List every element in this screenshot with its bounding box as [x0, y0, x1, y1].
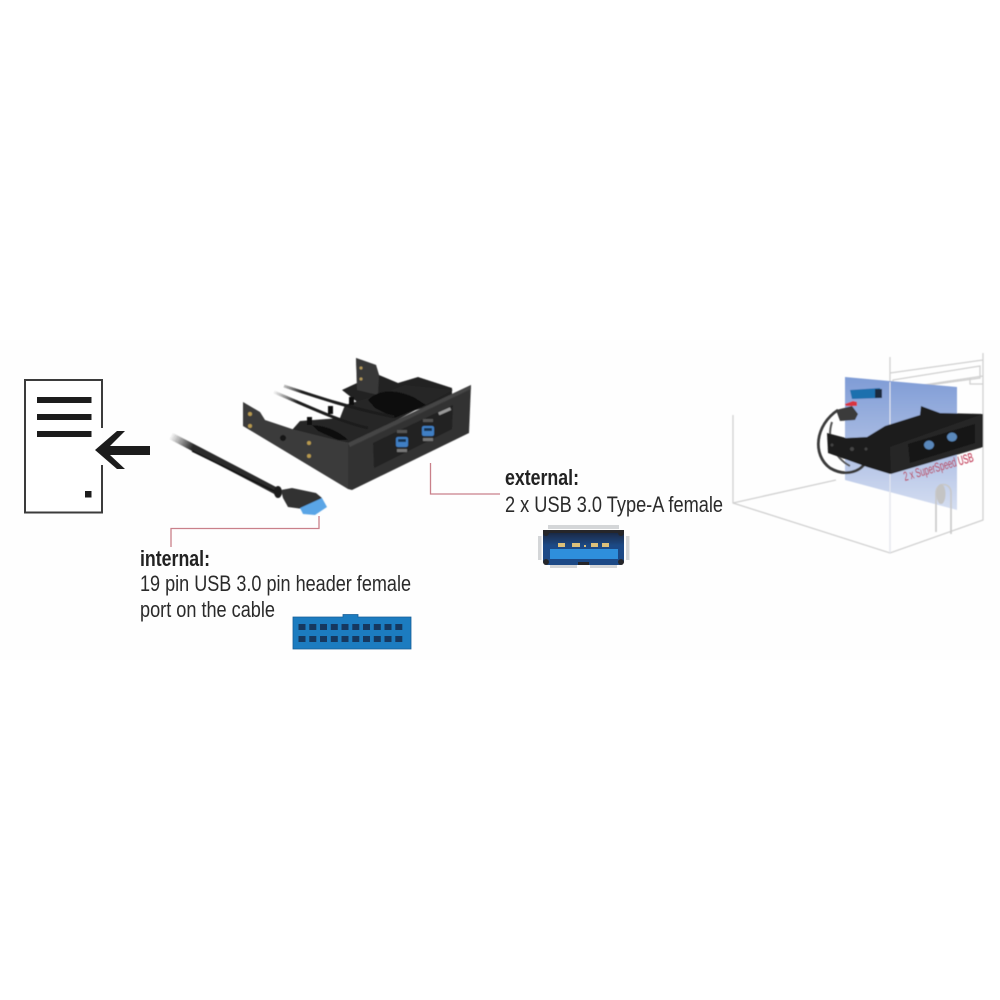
arrow: into the PC — [95, 431, 150, 469]
red insertion arrow — [845, 401, 857, 406]
icon: USB 3.0 Type-A port — [538, 525, 630, 568]
icon: power button — [85, 491, 92, 498]
contacts — [558, 543, 609, 547]
transparent case wireframe — [733, 353, 983, 553]
icon: PC tower outline — [25, 380, 102, 512]
label: external: external: — [505, 465, 579, 490]
bezel product photo — [243, 358, 471, 490]
silver shell tabs — [538, 525, 630, 568]
icon: drive bay lines — [37, 397, 92, 437]
mounted bezel — [827, 406, 983, 474]
USB 3.0 port right — [422, 419, 434, 441]
interior of the bracket — [292, 385, 453, 444]
text block: internal — [140, 546, 411, 622]
back mounting plate — [342, 358, 452, 420]
USB 3.0 port left — [396, 430, 408, 452]
mounting holes — [830, 444, 868, 451]
text block: external — [505, 465, 723, 517]
recessed front panel — [373, 405, 453, 468]
brand logo on bezel — [438, 407, 451, 415]
icon: 19 pin header — [293, 614, 411, 649]
flat cable — [171, 436, 278, 492]
connector blue pin header — [300, 498, 327, 515]
looped cable — [818, 410, 866, 473]
description line 1: 19 pin USB 3.0 pin header female — [140, 571, 411, 596]
description: 2 x USB 3.0 Type-A female — [505, 492, 723, 517]
port left — [924, 440, 934, 450]
port right — [947, 432, 957, 442]
blue motherboard plane — [845, 377, 957, 510]
cable well — [368, 391, 426, 418]
left mounting plate — [243, 402, 348, 489]
rear cable slot — [936, 484, 951, 534]
internal cables — [284, 386, 394, 417]
cable with 19 pin connector — [171, 436, 327, 515]
blue header on board — [850, 388, 882, 399]
description line 2: port on the cable — [140, 597, 275, 622]
port body — [543, 530, 624, 565]
blue tongue — [550, 549, 618, 559]
red leader line: external — [430, 463, 500, 494]
header body — [293, 614, 411, 649]
port corner clips — [543, 530, 624, 565]
front face of bezel — [348, 385, 471, 490]
connector housing — [281, 488, 322, 509]
strain relief knot — [274, 486, 282, 498]
bezel front panel — [908, 424, 975, 463]
PC case illustration — [733, 353, 983, 553]
icon: PC tower with insertion arrow — [25, 380, 150, 512]
header pin holes — [298, 624, 402, 642]
red leader line: internal — [171, 516, 319, 547]
label: internal: internal: — [140, 546, 210, 571]
